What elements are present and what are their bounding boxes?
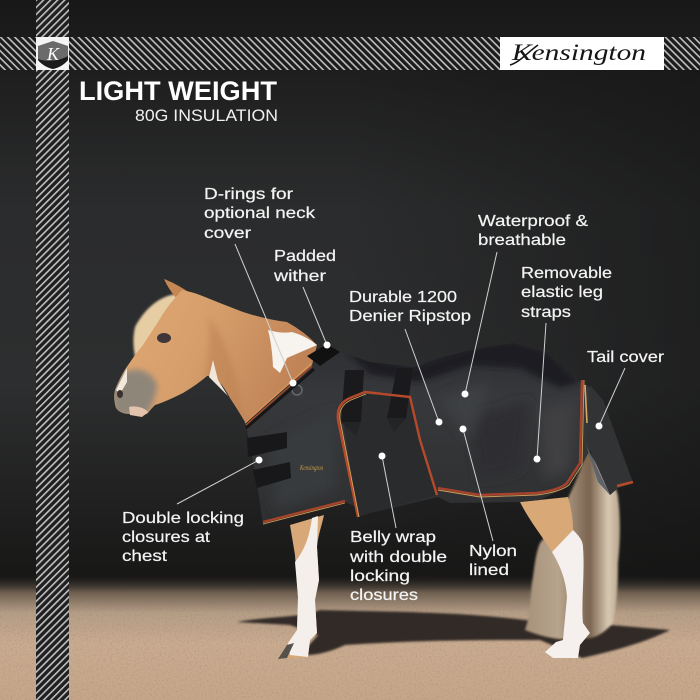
neck shading [206,324,238,410]
callout: nylon lined: lined [469,562,509,579]
callout: D-rings [204,186,316,386]
callout: D-rings: optional neck [204,205,316,222]
callout: waterproof [462,213,588,398]
callout: nylon lined: Nylon [469,543,517,560]
callout: waterproof: Waterproof & [478,213,588,230]
horizontal stripe band [0,37,700,70]
shield logo: K [46,44,60,64]
strap 1 [341,370,364,422]
callout: padded wither [273,248,336,348]
chest strap 1 [247,432,287,457]
ground shadow [237,610,670,658]
hoof [278,643,294,659]
blanket body [246,343,633,525]
tail cover shade [587,385,633,495]
Kensington brand box [500,37,664,70]
strap 2 [387,368,413,418]
callout: padded wither: wither [273,268,327,285]
callout: chest closures [122,456,262,565]
callout: belly wrap: locking [350,568,410,585]
head and neck [114,290,317,422]
callout: tail cover [587,349,665,430]
mane [133,294,180,357]
callout: leg straps: straps [521,304,571,321]
foreleg [278,515,324,659]
callout: belly wrap [349,452,447,604]
eye [157,333,171,343]
horse [112,279,620,659]
D-ring [292,385,302,395]
shield logo [36,37,69,70]
callout: D-rings: D-rings for [204,186,294,203]
title [79,76,278,125]
ground [0,575,700,700]
blanket [245,340,633,525]
callout: belly wrap: with double [349,549,447,566]
neck trim [245,364,314,428]
chest strap 2 [253,462,291,488]
callout: padded wither: Padded [274,248,336,265]
throat white mark [209,360,228,396]
title: LIGHT WEIGHT [79,76,277,106]
nostril [117,390,123,398]
background right falloff [0,70,700,600]
white shoulder patch [268,330,317,373]
muzzle white [116,368,127,394]
callout: ripstop [349,289,471,426]
callout: chest closures: chest [122,548,168,565]
hind leg [520,497,573,552]
callout: chest closures: Double locking [122,510,244,527]
title: 80G INSULATION [135,107,278,125]
callout: ripstop: Durable 1200 [349,289,457,306]
body trim [263,380,633,524]
ground texture [0,600,700,700]
muzzle grey [112,370,157,416]
callout: chest closures: closures at [122,529,211,546]
callout: nylon lined [460,426,517,579]
Kensington brand box: Kensington [511,40,646,65]
wither pad [307,344,340,366]
embroidered logo: Kensington [299,464,323,472]
lip [129,406,148,417]
ear [164,279,198,307]
pockets [341,418,406,436]
callout: waterproof: breathable [478,232,566,249]
callout: belly wrap: closures [350,587,418,604]
belly flap [340,394,437,517]
lining under tail cover [586,445,610,495]
folds and back shading [270,340,580,510]
callout: tail cover: Tail cover [587,349,665,366]
vertical stripe band [36,0,69,700]
foreleg white marking [288,516,319,657]
tail [525,450,620,640]
callout: D-rings: cover [204,225,252,242]
callout: leg straps: elastic leg [521,284,603,301]
callout: ripstop: Denier Ripstop [349,308,471,325]
callout: leg straps: Removable [521,265,612,282]
callout: leg straps [521,265,612,462]
callout: belly wrap: Belly wrap [350,529,436,546]
hind leg white marking [545,530,590,658]
